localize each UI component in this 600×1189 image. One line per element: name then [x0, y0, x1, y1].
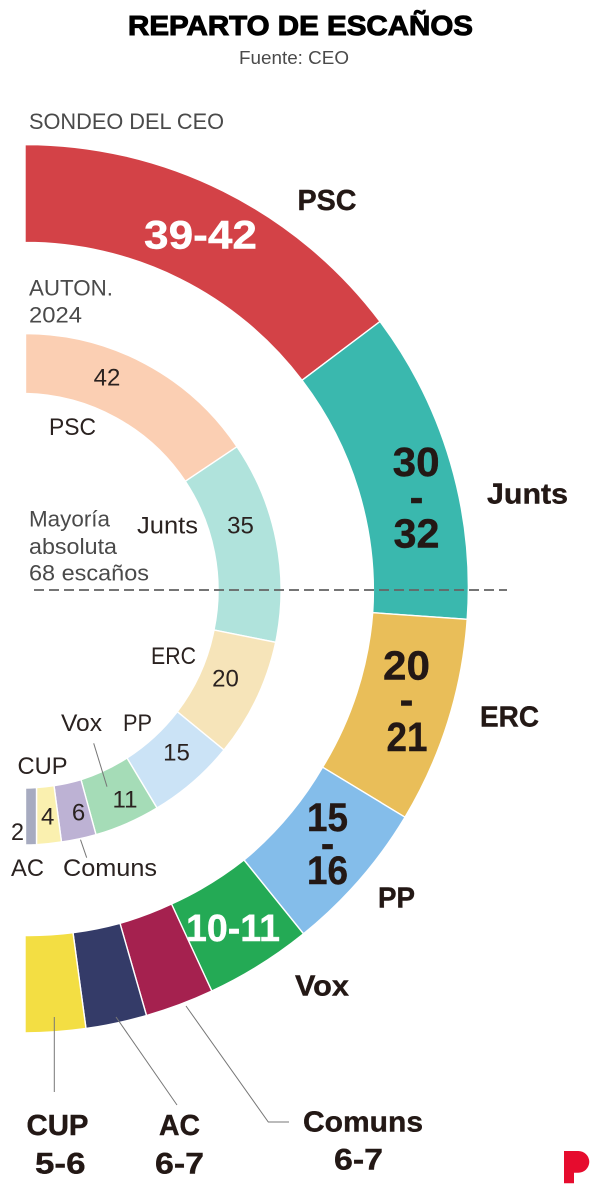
outer party labels: Junts — [487, 478, 568, 510]
inner values and labels: PSC — [49, 414, 96, 441]
heading: auton. 2024 — [29, 276, 113, 328]
heading: auton. 2024: AUTON. — [29, 276, 113, 300]
source: Fuente: CEO — [239, 48, 349, 68]
majority note — [29, 506, 149, 586]
outer values: - — [400, 677, 413, 723]
segment: Junts — [302, 322, 468, 619]
segment: Comuns — [120, 904, 212, 1016]
segment: ERC 2024 — [177, 630, 276, 750]
segment: PP — [244, 767, 405, 934]
label: Comuns: 6-7 — [334, 1143, 383, 1176]
inner values and labels: ERC — [151, 643, 196, 670]
leader: Comuns — [186, 1006, 289, 1122]
inner values and labels: 42 — [94, 364, 120, 392]
segment: CUP — [25, 933, 86, 1033]
segment: PSC 2024 — [26, 334, 237, 481]
chart: inner semicircle, 2024 results — [26, 334, 281, 845]
outer values: 21 — [386, 714, 428, 760]
outer party labels — [295, 185, 568, 1003]
majority line — [34, 589, 507, 591]
leader: CUP — [53, 1017, 55, 1092]
chart: outer semicircle, CEO poll seats — [25, 144, 468, 1033]
inner values and labels: 4 — [41, 803, 54, 830]
inner values and labels: Junts — [137, 512, 198, 539]
segment: Comuns 2024 — [54, 780, 96, 842]
inner values and labels: 11 — [113, 787, 137, 814]
outer values: 30 — [393, 439, 440, 485]
segment: PSC — [25, 144, 380, 380]
title: REPARTO DE ESCAÑOS — [128, 10, 473, 41]
outer values — [144, 213, 440, 950]
outer values: 15 — [307, 796, 348, 840]
outer values: 32 — [394, 510, 440, 556]
outer party labels: Vox — [295, 971, 349, 1003]
label: Comuns — [303, 1107, 423, 1176]
leader: AC — [116, 1017, 177, 1105]
logo — [564, 1151, 589, 1183]
inner values and labels: 35 — [227, 512, 254, 539]
outer party labels: PP — [378, 882, 415, 914]
majority note: 68 escaños — [29, 560, 149, 586]
inner values and labels: 20 — [212, 666, 239, 692]
leader: Vox 2024 — [94, 743, 107, 787]
label: CUP: 5-6 — [35, 1147, 86, 1180]
inner values and labels — [11, 364, 254, 882]
majority note: Mayoría — [29, 506, 111, 532]
outer values: 16 — [307, 849, 348, 893]
inner values and labels: PP — [123, 710, 152, 737]
inner values and labels: 6 — [72, 800, 85, 826]
label: Comuns: Comuns — [303, 1107, 423, 1139]
inner values and labels: Vox — [61, 710, 102, 737]
segment: Vox — [172, 860, 304, 991]
outer values: - — [410, 474, 423, 520]
outer values: 20 — [383, 642, 430, 688]
label: CUP: CUP — [26, 1110, 88, 1142]
segment: AC 2024 — [26, 788, 36, 845]
outer values: - — [321, 822, 334, 866]
heading: sondeo del CEO: SONDEO DEL CEO — [29, 109, 224, 134]
leader: Comuns 2024 — [80, 840, 87, 858]
majority note: absoluta — [29, 534, 118, 559]
inner values and labels: 15 — [163, 740, 190, 767]
segment: AC — [73, 923, 146, 1028]
outer party labels: PSC — [298, 185, 357, 217]
segment: Junts 2024 — [185, 447, 281, 642]
label: AC — [155, 1110, 204, 1180]
label: AC: 6-7 — [155, 1147, 204, 1180]
label: CUP — [26, 1110, 88, 1180]
inner values and labels: Comuns — [63, 855, 157, 882]
outer party labels: ERC — [480, 702, 539, 734]
outer values: 10-11 — [186, 908, 280, 950]
label: AC: AC — [159, 1110, 200, 1142]
heading: auton. 2024: 2024 — [29, 302, 82, 328]
inner values and labels: CUP — [18, 753, 68, 780]
segment: CUP 2024 — [36, 786, 62, 845]
outer values: 39-42 — [144, 213, 257, 257]
inner values and labels: AC — [11, 855, 44, 882]
segment: ERC — [323, 613, 467, 817]
segment: PP 2024 — [127, 712, 224, 808]
segment: Vox 2024 — [81, 758, 157, 835]
inner values and labels: 2 — [11, 819, 24, 846]
